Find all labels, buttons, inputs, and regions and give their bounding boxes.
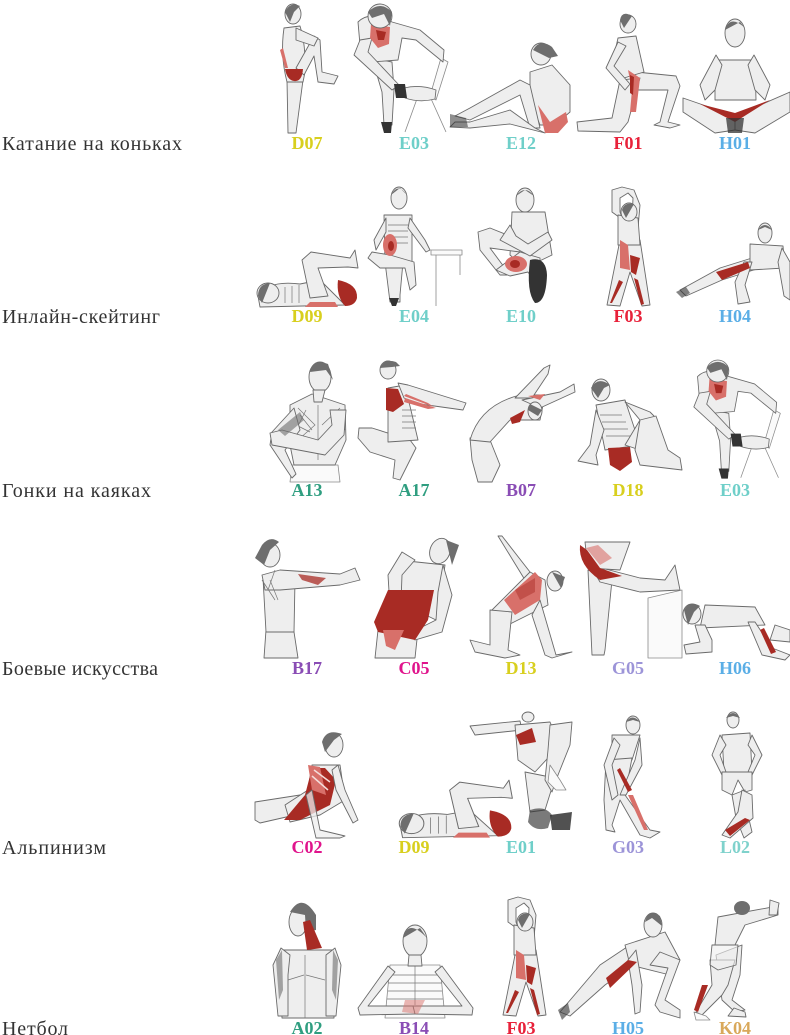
figure: F03 [607, 187, 650, 306]
figure: D07 [280, 4, 338, 133]
code labels row 1: F01 [614, 133, 642, 153]
code labels row 1: H01 [719, 133, 751, 153]
code labels row 3: D18 [612, 480, 644, 500]
code labels row 1: E12 [506, 133, 536, 153]
code labels row 1: D07 [292, 133, 322, 153]
code labels row 5: E01 [506, 837, 536, 857]
code labels row 6 [292, 1018, 751, 1035]
figure: E03 [354, 4, 448, 133]
code labels row 4 [292, 658, 751, 678]
code labels row 1 [292, 133, 751, 153]
figure: E03 [694, 360, 780, 479]
row 1 label: Катание на коньках [2, 133, 182, 155]
code labels row 5: L02 [720, 837, 750, 857]
code labels row 5 [292, 837, 750, 857]
code labels row 2: E04 [399, 306, 429, 326]
figure: D18 [578, 379, 682, 471]
code labels row 2: E10 [506, 306, 536, 326]
code labels row 4: D13 [506, 658, 536, 678]
row 5 label: Альпинизм [2, 837, 106, 859]
figure: E04 [368, 187, 462, 306]
figure: D09 [257, 250, 358, 307]
figure: K04 [694, 900, 779, 1020]
code labels row 3 [292, 480, 750, 500]
figure: C02 [255, 732, 358, 838]
figure: A02 [273, 903, 341, 1018]
figure: H06 [683, 604, 790, 660]
figure: B14 [358, 925, 473, 1018]
code labels row 1: E03 [399, 133, 429, 153]
row 3 label: Гонки на каяках [2, 480, 151, 502]
code labels row 5: G03 [612, 837, 644, 857]
code labels row 4: C05 [398, 658, 430, 678]
figure: H05 [558, 913, 680, 1020]
figure: D13 [470, 536, 572, 658]
figure: E12 [450, 43, 570, 133]
figure: E01 [470, 712, 572, 830]
figure: B07 [470, 365, 575, 482]
code labels row 4: B17 [292, 658, 322, 678]
row 2 label: Инлайн-скейтинг [2, 306, 160, 328]
code labels row 2 [292, 306, 751, 326]
figure: F03 [503, 897, 546, 1016]
figure: G03 [604, 716, 660, 838]
figure: H04 [676, 223, 790, 304]
code labels row 5: C02 [292, 837, 322, 857]
code labels row 2: H04 [719, 306, 751, 326]
figure: A17 [358, 361, 466, 480]
code labels row 4: G05 [612, 658, 644, 678]
figure: C05 [374, 535, 459, 658]
figure: D09 [399, 780, 512, 838]
code labels row 3: A17 [398, 480, 430, 500]
code labels row 5: D09 [398, 837, 430, 857]
code labels row 3: B07 [506, 480, 536, 500]
figure: A13 [270, 362, 346, 482]
code labels row 3: E03 [720, 480, 750, 500]
code labels row 2: F03 [614, 306, 642, 326]
figure: B17 [255, 539, 360, 658]
code labels row 2: D09 [292, 306, 322, 326]
figure: E10 [478, 188, 552, 303]
figure: G05 [580, 542, 682, 658]
figure: F01 [577, 14, 680, 132]
figure: L02 [712, 712, 762, 838]
row 4 label: Боевые искусства [2, 658, 158, 680]
code labels row 3: A13 [292, 480, 322, 500]
code labels row 4: H06 [719, 658, 751, 678]
figure: H01 [683, 19, 790, 133]
